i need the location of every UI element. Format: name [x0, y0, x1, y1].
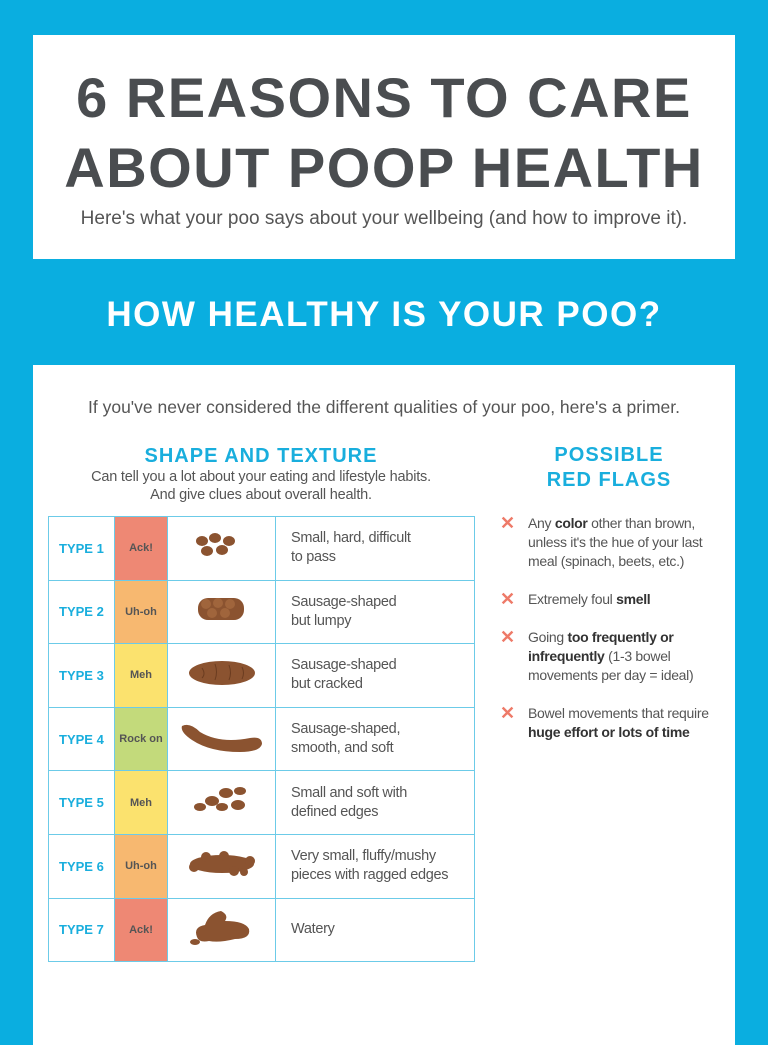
- flag: color: Any color other than brown, unless it's the hue of your last meal (spinach, beets, etc.): [528, 515, 702, 569]
- title panel: [33, 35, 735, 259]
- red flags heading: RED FLAGS: [547, 469, 671, 491]
- stool type table: but cracked: [291, 676, 363, 692]
- flag: frequency: Going too frequently or: [528, 629, 674, 645]
- section heading: HOW HEALTHY IS YOUR POO?: [106, 295, 662, 334]
- panel: red flags: [500, 444, 709, 740]
- stool type table: Very small, fluffy/mushy: [291, 848, 436, 864]
- stool type table: Sausage-shaped,: [291, 721, 400, 737]
- shape and texture heading: Can tell you a lot about your eating and lifestyle habits.: [91, 469, 431, 485]
- stool type table: TYPE 6: [59, 859, 104, 874]
- stool type table: smooth, and soft: [291, 740, 393, 756]
- flag: smell: Extremely foul smell: [528, 591, 650, 607]
- intro text: If you've never considered the different qualities of your poo, here's a primer.: [88, 397, 680, 417]
- title: [64, 66, 704, 199]
- stool type table: TYPE 3: [59, 668, 104, 683]
- red flags heading: [547, 444, 671, 491]
- panel: main: [33, 365, 735, 1045]
- red flags heading: POSSIBLE: [554, 444, 664, 466]
- stool type table: Sausage-shaped: [291, 594, 396, 610]
- stool type table: Watery: [291, 921, 335, 937]
- subtitle: Here's what your poo says about your wellbeing (and how to improve it).: [81, 208, 687, 229]
- stool type table: Sausage-shaped: [291, 657, 396, 673]
- stool type table: but lumpy: [291, 613, 351, 629]
- stool type table: TYPE 5: [59, 795, 104, 810]
- flag: effort: Bowel movements that require huge effort or lots of time: [528, 705, 709, 740]
- stool type table: TYPE 4: [59, 732, 104, 747]
- shape and texture heading: And give clues about overall health.: [150, 487, 372, 503]
- stool type table: Small and soft with: [291, 785, 407, 801]
- stool type table: Small, hard, difficult: [291, 530, 411, 546]
- flag: frequency: infrequently (1-3 bowel movements per day = ideal): [528, 648, 693, 683]
- shape and texture heading: [91, 445, 431, 503]
- flag: frequency: [500, 627, 693, 683]
- stool type table: defined edges: [291, 804, 378, 820]
- title: 6 REASONS TO CARE: [76, 66, 692, 129]
- stool type table: Uh-oh: [125, 606, 157, 618]
- stool type table: TYPE 2: [59, 604, 104, 619]
- stool type table: Ack!: [129, 542, 153, 554]
- flag: frequency: ✕: [500, 627, 515, 647]
- flag: smell: ✕: [500, 589, 515, 609]
- stool type table: pieces with ragged edges: [291, 867, 448, 883]
- flag: smell: [500, 589, 650, 609]
- stool type table: TYPE 7: [59, 922, 104, 937]
- stool type table: [48, 516, 475, 962]
- stool type table: Ack!: [129, 924, 153, 936]
- title: ABOUT POOP HEALTH: [64, 136, 704, 199]
- flag: color: ✕: [500, 513, 515, 533]
- shape and texture heading: SHAPE AND TEXTURE: [145, 445, 377, 467]
- stool type table: TYPE 1: [59, 541, 104, 556]
- flag: effort: ✕: [500, 703, 515, 723]
- stool type table: Rock on: [119, 733, 163, 745]
- stool type table: to pass: [291, 549, 336, 565]
- stool type table: Uh-oh: [125, 860, 157, 872]
- stool type table: Meh: [130, 797, 152, 809]
- stool type table: Meh: [130, 669, 152, 681]
